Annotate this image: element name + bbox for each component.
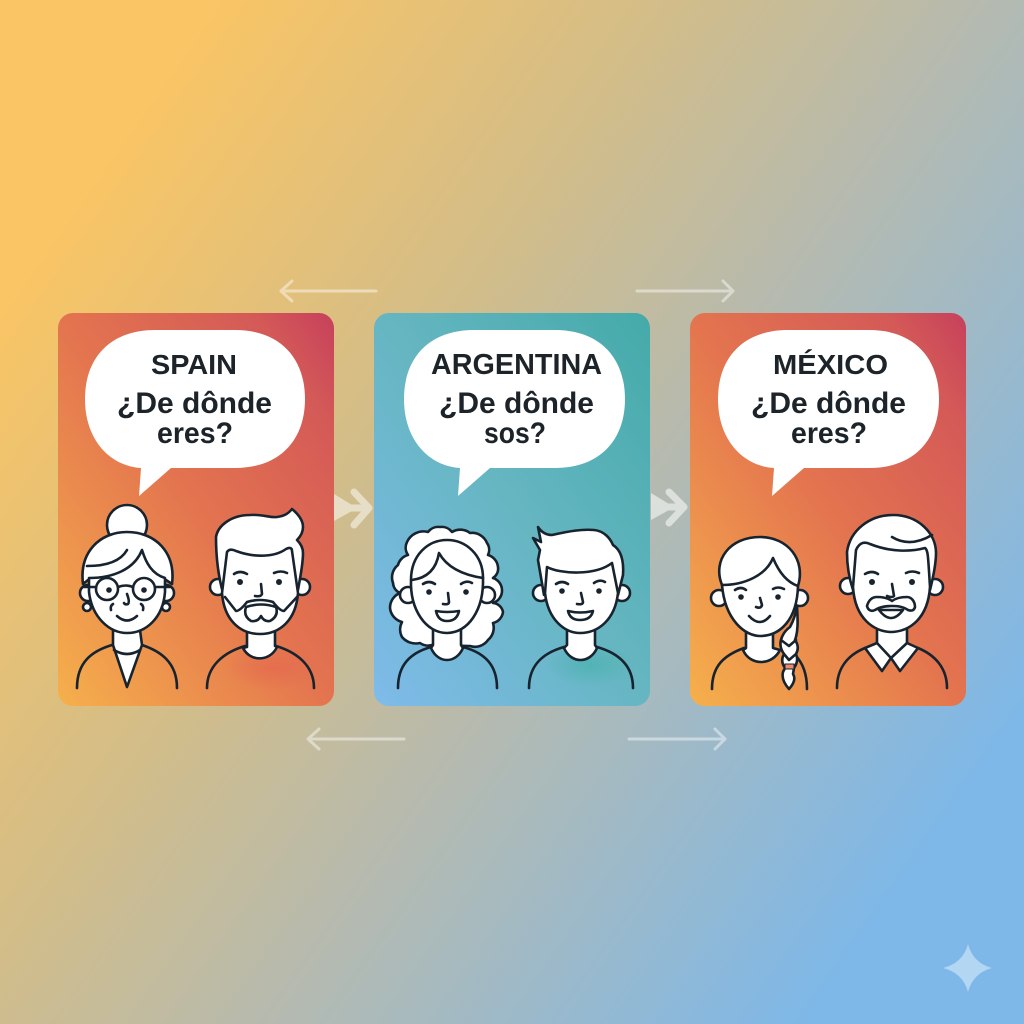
heading: Mexico: MÉXICO (773, 349, 888, 380)
arrow: Argentina to Mexico (651, 492, 684, 523)
panel: Argentina (374, 313, 650, 706)
arrow: bottom right (629, 729, 725, 749)
question: Spain: ¿De dônde (117, 387, 272, 420)
arrow: bottom left (308, 729, 404, 749)
character: older woman with glasses and bun (77, 505, 177, 688)
character: older man with moustache (837, 515, 947, 688)
panel: Spain (58, 313, 334, 706)
character: young man with swept hair (529, 527, 635, 688)
question line 2: Argentina: sos? (484, 417, 546, 450)
arrow: top left (281, 281, 376, 301)
speech bubble: Argentina (404, 330, 625, 496)
speech bubble: Spain (85, 330, 305, 496)
panel: Mexico (690, 313, 966, 706)
icon: four-point sparkle (943, 944, 992, 992)
character: bearded man (207, 509, 320, 690)
character: woman with curly hair (390, 527, 503, 688)
question: Argentina: ¿De dônde (439, 387, 594, 420)
question line 2: Spain: eres? (157, 417, 233, 450)
arrow: Spain to Argentina (334, 492, 369, 525)
arrow: top right (637, 281, 733, 301)
braid (780, 606, 798, 689)
heading: Argentina: ARGENTINA (431, 349, 602, 381)
character: girl with braid (711, 537, 808, 689)
heading: Spain: SPAIN (151, 349, 237, 380)
collar (865, 643, 918, 671)
speech bubble: Mexico (718, 330, 939, 496)
question line 2: Mexico: eres? (791, 417, 867, 450)
question: Mexico: ¿De dônde (751, 387, 906, 420)
